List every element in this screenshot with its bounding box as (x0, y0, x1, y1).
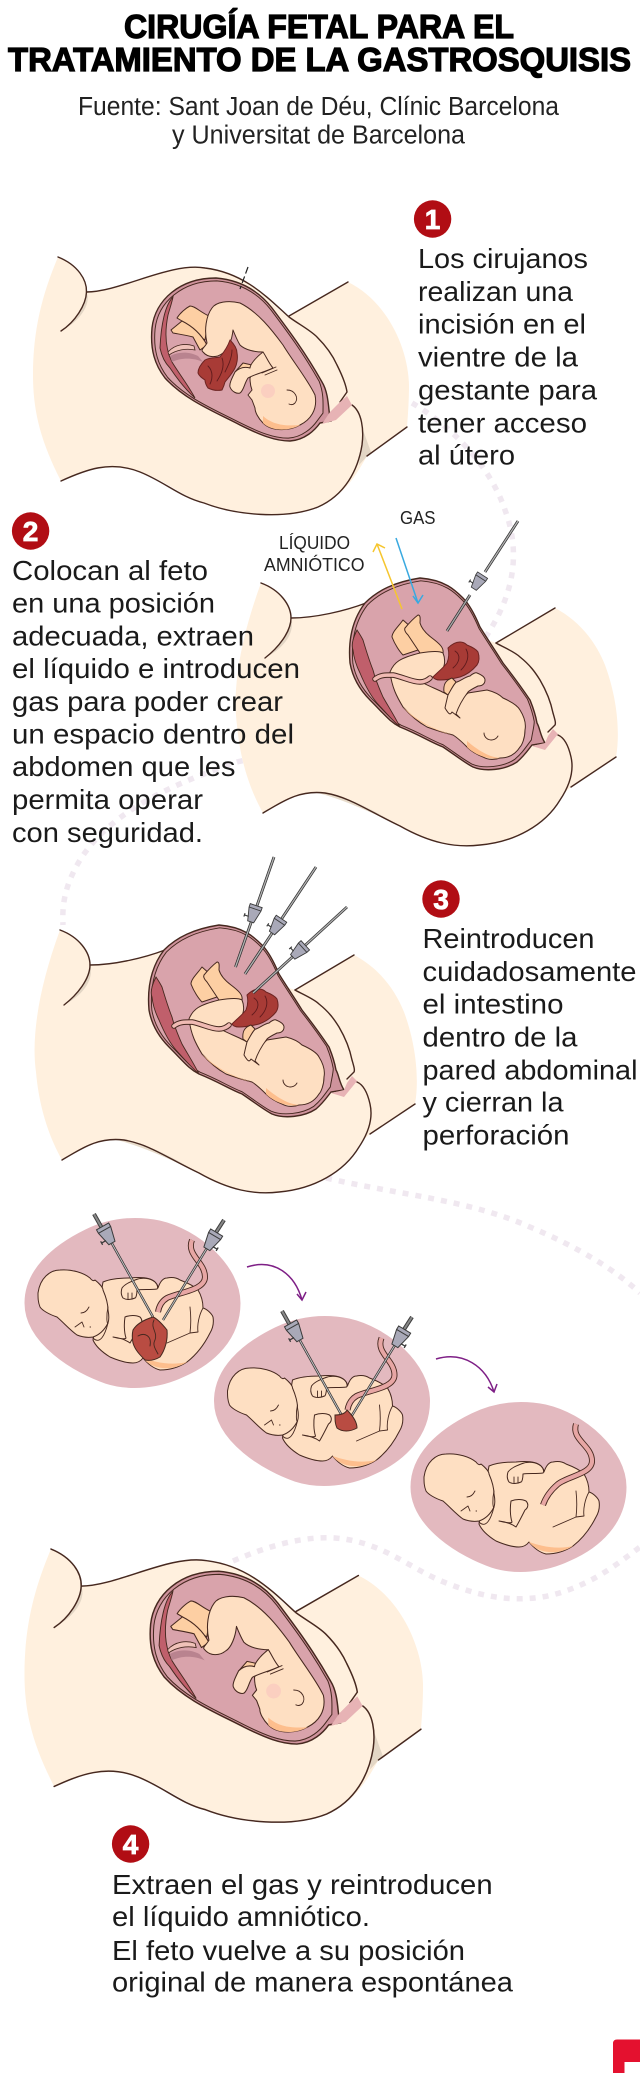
title: CIRUGÍA FETAL PARA EL (124, 8, 514, 45)
text: step 2: gas para poder crear (12, 686, 283, 717)
title (8, 8, 631, 78)
source (78, 93, 560, 150)
text: step 1: al útero (418, 439, 515, 470)
needles (236, 857, 347, 993)
text: step 2: en una posición (12, 588, 215, 619)
badge 4 (112, 1825, 149, 1863)
label: amniotic fluid: AMNIÓTICO (264, 554, 364, 575)
arrow: gas in (396, 538, 423, 603)
text: step 4: El feto vuelve a su posición (112, 1935, 465, 1966)
umbilical cord (543, 1424, 592, 1505)
source: Fuente: Sant Joan de Déu, Clínic Barcelona (78, 93, 560, 121)
text: step 3: Reintroducen (422, 923, 594, 954)
title: TRATAMIENTO DE LA GASTROSQUISIS (8, 41, 631, 78)
text: step 2: abdomen que les (12, 751, 235, 782)
text: step 1: tener acceso (418, 407, 587, 438)
badge 2 (12, 512, 49, 550)
panel: step 3 illustration (35, 857, 417, 1193)
source: y Universitat de Barcelona (172, 122, 466, 150)
text: step 1: Los cirujanos (418, 243, 588, 274)
body silhouette 1 (33, 257, 409, 515)
exposed intestine small (335, 1410, 357, 1431)
badge 1 (414, 200, 451, 238)
badge 3 (422, 880, 460, 918)
exposed intestine large (132, 1317, 167, 1360)
decorative dotted trails (63, 403, 640, 1599)
panel: step 2 illustration (236, 508, 618, 846)
panel: step 4 illustration (24, 1549, 423, 1822)
text: step 3: y cierran la (422, 1087, 564, 1118)
arrow: sequence A to B (247, 1265, 306, 1300)
text: step 2 (12, 555, 300, 848)
badge 4: 4 (123, 1829, 139, 1860)
panel: closure sequence A (23, 1214, 242, 1389)
label: amniotic fluid: LÍQUIDO (279, 533, 350, 553)
incision mark (240, 267, 248, 289)
badge 3: 3 (433, 884, 449, 915)
panel: closure sequence C (409, 1400, 628, 1573)
uterus and fetus 2 (350, 578, 558, 770)
text: step 4: original de manera espontánea (112, 1967, 514, 1998)
text: step 1 (418, 243, 598, 470)
label: gas: GAS (400, 508, 436, 528)
uterus and fetus 1 (152, 278, 352, 441)
badge 2: 2 (23, 516, 38, 547)
text: step 3: pared abdominal (422, 1054, 638, 1085)
text: step 3: dentro de la (422, 1022, 578, 1053)
text: step 4 (112, 1869, 514, 1998)
text: step 1: vientre de la (418, 342, 579, 373)
text: step 2: con seguridad. (12, 817, 203, 848)
text: step 3: perforación (422, 1120, 570, 1151)
panel: step 1 illustration (33, 257, 409, 515)
label: amniotic fluid (264, 533, 364, 575)
arrow: amniotic fluid out (373, 544, 402, 609)
text: step 1: realizan una (418, 276, 574, 307)
body and uterus 3 (35, 925, 417, 1193)
text: step 1: incisión en el (418, 309, 586, 340)
badge 1: 1 (425, 204, 440, 235)
text: step 3: cuidadosamente (422, 956, 636, 987)
text: step 2: permita operar (12, 784, 203, 815)
text: step 2: Colocan al feto (12, 555, 208, 586)
text: step 3 (422, 923, 638, 1151)
needle (447, 521, 518, 631)
arrow: sequence B to C (436, 1357, 497, 1392)
text: step 4: Extraen el gas y reintroducen (112, 1869, 493, 1900)
text: step 1: gestante para (418, 374, 598, 405)
text: step 2: el líquido e introducen (12, 653, 300, 684)
text: step 3: el intestino (422, 989, 564, 1020)
body silhouette 2 (236, 583, 618, 846)
logo (613, 2040, 640, 2073)
text: step 2: un espacio dentro del (12, 719, 294, 750)
text: step 4: el líquido amniótico. (112, 1901, 370, 1932)
text: step 2: adecuada, extraen (12, 621, 254, 652)
panel: closure sequence B (212, 1311, 432, 1487)
